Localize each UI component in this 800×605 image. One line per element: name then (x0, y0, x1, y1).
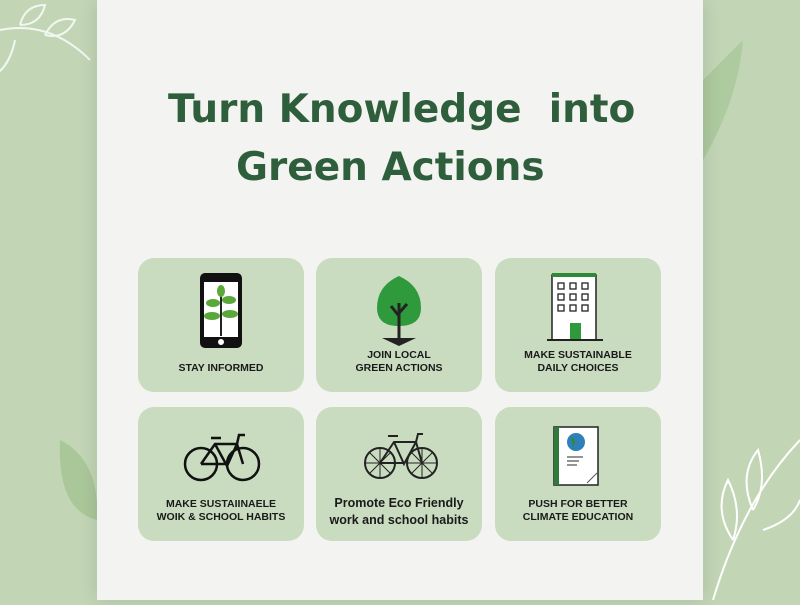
title (168, 87, 635, 190)
card: work & school habits: WOIK & SCHOOL HABITS (157, 511, 285, 523)
card: sustainable daily choices: DAILY CHOICES (537, 362, 619, 374)
card: promote eco friendly: Promote Eco Friendly (334, 496, 464, 510)
text: Turn Knowledge into (168, 87, 635, 132)
card: join local green actions: JOIN LOCAL (367, 349, 431, 361)
card: work & school habits: MAKE SUSTAIINAELE (166, 498, 276, 510)
icon: phone with plant (200, 273, 242, 348)
left background leaves (0, 4, 97, 520)
card: join local green actions (316, 258, 482, 392)
icon: bicycle spokes (364, 433, 438, 479)
card: climate education (495, 407, 661, 541)
card: promote eco friendly: work and school habits (330, 513, 468, 527)
text: Green Actions (236, 145, 545, 190)
card: climate education: PUSH FOR BETTER (528, 498, 628, 510)
center panel (97, 0, 703, 600)
card: climate education: CLIMATE EDUCATION (523, 511, 633, 523)
card: join local green actions: GREEN ACTIONS (355, 362, 443, 374)
card: promote eco friendly (316, 407, 482, 541)
card: stay informed: STAY INFORMED (178, 362, 263, 374)
right background leaves (703, 40, 800, 600)
card: sustainable daily choices: MAKE SUSTAINABLE (524, 349, 632, 361)
icon: tree (377, 276, 421, 346)
card: work & school habits (138, 407, 304, 541)
icon: building (547, 273, 603, 341)
icon: bicycle (184, 434, 260, 482)
card: sustainable daily choices (495, 258, 661, 392)
card: stay informed (138, 258, 304, 392)
icon: book with globe (553, 426, 599, 486)
